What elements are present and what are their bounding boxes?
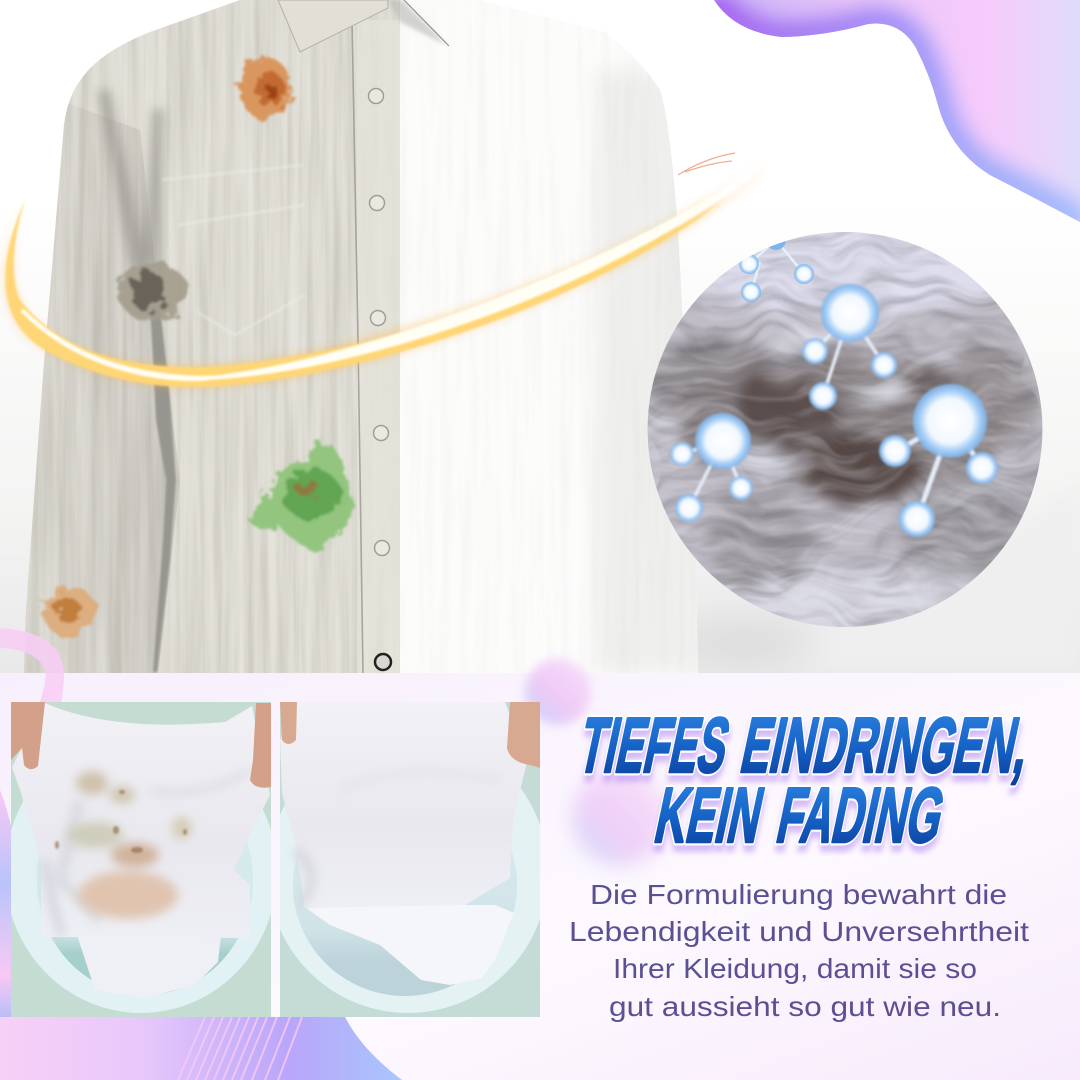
title: blue lettering: TIEFES [572,702,737,789]
molecule: left [670,413,753,522]
decorative blob: left edge [0,790,16,1022]
body text: gut aussieht so gut wie neu. [609,991,1001,1022]
photo: after washing [268,702,548,1017]
title [572,702,1038,866]
hands [11,702,271,788]
background soft shapes [675,480,1080,673]
title: blue lettering [572,702,1038,859]
stain specks [55,790,187,853]
shirt: armpit shading [97,90,164,270]
shirt: placket [352,20,400,673]
photo background [11,702,271,1017]
photo background [280,702,540,1017]
body text: Lebendigkeit und Unversehrtheit [569,916,1029,947]
stains [67,771,192,919]
title: blue lettering: KEIN [648,772,771,859]
title: white outline [572,702,1038,859]
water [293,852,517,996]
photo: before washing [5,702,277,1017]
decorative stripes: bottom [178,1017,302,1080]
stain: orange lower [43,587,97,637]
molecule: right [879,384,998,537]
body text [569,879,1029,1022]
decorative ring: over shirt hem [0,628,64,673]
decorative ball: upper [525,659,591,725]
title: white outline: FADING [770,772,952,859]
cloth shading [294,850,318,906]
cloth upper [12,703,270,938]
shirt: pocket [162,165,305,335]
shirt: sleeve gap [150,305,176,672]
shirt [0,0,700,673]
molecule: top partial [739,241,814,302]
cloth lower [77,935,221,998]
fibre strands [647,232,1043,628]
title: white outline: KEIN [648,772,771,859]
water [37,842,253,994]
fibre tones [645,220,1040,635]
bottom panel background [0,673,1080,1080]
top background [0,0,1080,673]
title: purple shadow [572,709,1038,866]
body text: Ihrer Kleidung, damit sie so [613,953,977,984]
title: purple shadow: KEIN [648,779,771,866]
decorative blob: top right [700,0,1080,230]
title: purple shadow: FADING [770,779,952,866]
title: blue lettering: FADING [770,772,952,859]
shirt: clean right half [400,0,700,673]
decorative ball: behind title [572,770,668,866]
basin [280,788,540,1013]
shirt: buttons [368,88,391,670]
magnified fibre circle [645,220,1043,635]
decorative ring: panel portion [30,673,64,730]
molecule: centre [802,284,897,410]
shirt: stained left half [0,0,400,673]
hands [280,702,540,768]
shirt: collar [278,0,449,52]
stain: orange top [239,57,291,119]
body text: Die Formulierung bewahrt die [590,879,1007,910]
cloth lower [302,905,514,985]
cloth folds [41,802,98,935]
title: purple shadow: TIEFES [572,709,737,796]
fibre base [648,232,1042,627]
basin [11,802,271,1013]
decorative blob: bottom [0,1017,402,1080]
stain: green [248,442,352,550]
title: white outline: TIEFES [572,702,737,789]
cloth upper [280,702,527,908]
stain: grey [117,262,187,320]
golden light ring [5,153,765,387]
